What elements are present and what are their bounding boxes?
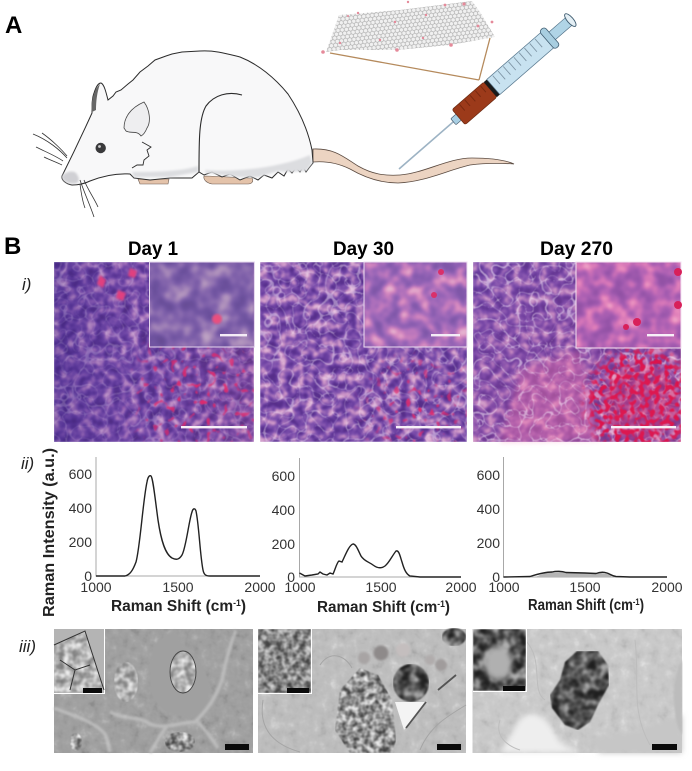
whiskers (33, 133, 98, 217)
x axis title: Raman Shift (cm (111, 598, 237, 615)
y axis title: Raman Intensity (a.u.) (41, 448, 58, 617)
y tick labels: 200 (69, 534, 92, 550)
front ear (124, 102, 149, 136)
x tick labels (488, 579, 683, 595)
red barrel ribs (460, 86, 486, 111)
red-filled barrel (452, 82, 497, 125)
graphene oxide sheet (321, 1, 495, 54)
scale bar (181, 426, 247, 428)
hind foot (204, 176, 253, 184)
connector lines from sheet to syringe (330, 38, 490, 80)
panel label B: B (4, 233, 21, 260)
graphene aggregates (335, 628, 466, 753)
mouse (33, 51, 514, 217)
y tick labels: 400 (69, 500, 92, 516)
x axis title: -1 (233, 598, 241, 608)
spectrum curve (504, 571, 667, 577)
histology: day 270 (473, 262, 682, 442)
needle (398, 121, 455, 170)
histology: day 30 (260, 262, 467, 442)
pink vascular accents (97, 268, 137, 301)
inset scale bar (83, 688, 102, 693)
x tick labels: 2000 (445, 579, 477, 595)
chart: day 270 Raman spectrum (477, 457, 683, 614)
histology: day 1 (54, 262, 254, 442)
inset scale bar (503, 686, 525, 691)
x axis title: -1 (633, 597, 640, 607)
x axis title: ) (445, 599, 450, 616)
organelles (374, 646, 388, 660)
eye (96, 143, 106, 153)
y tick labels: 0 (492, 569, 500, 585)
inset (149, 262, 254, 347)
inset (364, 262, 467, 347)
x tick labels (284, 579, 477, 595)
y tick labels: 200 (477, 535, 500, 551)
chart: day 1 Raman spectrum (69, 457, 276, 615)
y tick labels: 600 (69, 466, 92, 482)
y tick labels: 0 (287, 569, 295, 585)
spectrum curve (300, 544, 461, 577)
plunger stem (549, 18, 572, 40)
row label iii: iii) (19, 637, 36, 656)
x axis title: Raman Shift (cm (317, 599, 443, 616)
body shading (132, 155, 312, 177)
y tick labels (477, 467, 500, 585)
inset (258, 629, 312, 694)
plunger seal (484, 79, 500, 97)
y tick labels: 200 (272, 536, 295, 552)
electron micrograph: day 30 (258, 628, 466, 753)
back ear shadow (92, 84, 100, 112)
y tick labels: 400 (272, 502, 295, 518)
x tick labels: 2000 (651, 579, 683, 595)
x tick labels: 1500 (162, 579, 194, 595)
chest fur (132, 142, 151, 168)
x tick labels: 1000 (284, 579, 316, 595)
x tick labels: 1000 (488, 579, 520, 595)
y tick labels (69, 466, 92, 584)
electron micrograph: day 1 (54, 629, 253, 753)
x axis title: ) (640, 597, 644, 614)
chart: day 30 Raman spectrum (272, 458, 477, 616)
plunger cap (563, 12, 578, 28)
front foot (138, 179, 169, 184)
x tick labels: 1000 (80, 579, 112, 595)
hind leg contour (199, 93, 242, 172)
spectrum curve (96, 476, 260, 576)
x axis title: Raman Shift (cm (528, 597, 654, 614)
dark graphene aggregate (550, 651, 609, 730)
title: Day 1: Day 1 (128, 239, 178, 260)
scale bar (396, 426, 461, 428)
x tick labels: 1500 (569, 579, 601, 595)
x tick labels (80, 579, 276, 595)
panel label A: A (5, 12, 22, 39)
graphene aggregates (70, 651, 196, 752)
hub (451, 113, 462, 125)
y tick labels: 400 (477, 501, 500, 517)
syringe (391, 9, 580, 178)
body and head (62, 51, 313, 185)
x tick labels: 1500 (365, 579, 397, 595)
inset scale bar (287, 688, 309, 693)
x tick labels: 2000 (244, 579, 276, 595)
title: Day 270: Day 270 (540, 239, 613, 260)
y tick labels: 600 (272, 468, 295, 484)
row label i: i) (22, 275, 31, 294)
y tick labels (272, 468, 295, 585)
y tick labels: 0 (84, 568, 92, 584)
scale bar (652, 744, 677, 750)
eye highlight (98, 145, 101, 148)
blue barrel (487, 32, 554, 95)
graduation ticks (493, 39, 542, 84)
y tick labels: 600 (477, 467, 500, 483)
needle shape (406, 675, 456, 728)
scale bar (611, 426, 676, 428)
inset scale bar (220, 334, 247, 336)
flange (539, 27, 560, 49)
snout shading (62, 172, 79, 184)
tail (313, 149, 514, 183)
inset scale bar (647, 334, 674, 336)
scale bar (437, 744, 461, 750)
inset (54, 629, 105, 694)
scale bar (225, 744, 249, 750)
title: Day 30: Day 30 (333, 239, 394, 260)
baseline shaded residual (535, 572, 612, 577)
x axis title: -1 (437, 599, 445, 609)
inset (473, 629, 527, 692)
electron micrograph: day 270 (472, 629, 682, 753)
row label ii: ii) (21, 454, 34, 473)
inset (576, 262, 682, 348)
inset scale bar (431, 334, 460, 336)
x axis title: ) (241, 598, 246, 615)
bright gap (395, 702, 426, 730)
